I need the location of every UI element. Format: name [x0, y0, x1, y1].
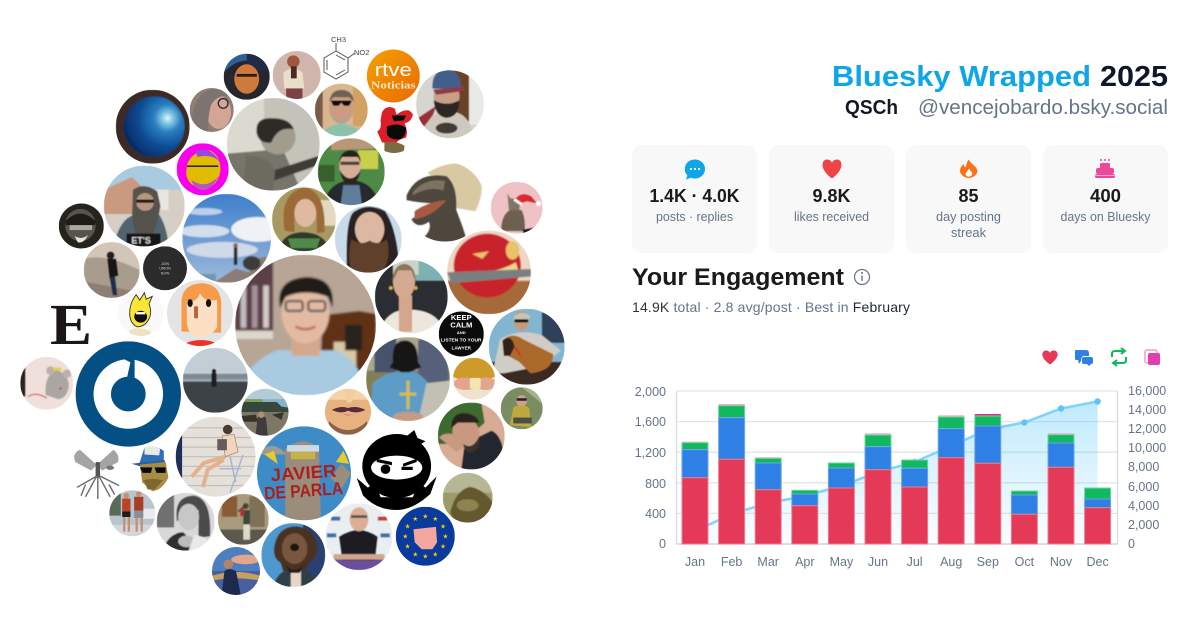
avatar: statue with cap and sunglasses [127, 445, 173, 491]
avatar: keep calm poster [439, 312, 484, 356]
avatar: chemical molecule: CH3 [331, 35, 346, 44]
icon: replies bubbles [1075, 350, 1093, 366]
avatar: man with dog [489, 309, 565, 385]
stat label: likes received [794, 209, 869, 224]
stat label: day posting [936, 209, 1001, 224]
avatar: El Español E logo: E [50, 292, 92, 357]
avatar: man with long wig [272, 187, 336, 251]
avatar: rat drawing [20, 357, 73, 410]
bar: Feb [719, 404, 745, 544]
avatar: blue eye [116, 90, 190, 164]
month labels: Dec [1086, 555, 1109, 569]
avatar: EU stars with fist: ★ [432, 551, 438, 558]
title: 2025 [1100, 61, 1168, 93]
cumulative area [695, 402, 1098, 544]
avatar: raptor with wool hat [407, 163, 482, 242]
month labels: Aug [940, 555, 962, 569]
avatar: man with sunglasses [315, 84, 368, 136]
avatar: sketch of person in chair [176, 417, 256, 497]
avatar: EU stars with fist: ★ [405, 544, 411, 551]
chart: monthly engagement [635, 384, 1166, 569]
avatar: dark text circle: NOW [161, 271, 170, 275]
panel: likes received [769, 145, 894, 253]
icon: chat bubble [685, 159, 705, 180]
avatar: EU stars with fist: ★ [432, 516, 438, 523]
avatar: keep calm poster: LISTEN TO YOUR [441, 338, 482, 343]
avatar: dark text circle: UNION [159, 267, 171, 271]
avatar: EU stars with fist: ★ [402, 534, 408, 541]
avatar: figure in street [218, 494, 269, 545]
avatar: blue target logo [76, 341, 181, 447]
avatar: toad [443, 473, 493, 523]
avatar: keep calm poster: LAWYER [452, 345, 472, 350]
avatar: keep calm poster: CALM [450, 321, 472, 330]
stat value: 400 [1090, 186, 1121, 206]
avatar: man in shop [318, 138, 385, 205]
right axis labels: 0 [1128, 537, 1135, 551]
display name: QSCh [845, 97, 898, 119]
month labels: Oct [1015, 555, 1035, 569]
right axis labels: 14,000 [1128, 403, 1166, 417]
avatar: homer cartoon [118, 290, 164, 336]
avatar: dark text circle [143, 246, 187, 290]
panel: posts and replies [632, 145, 757, 253]
avatar: rtve Noticias logo: rtve [375, 60, 412, 80]
month labels: Apr [795, 555, 815, 569]
avatar: Javier de Parla cartoon: JAVIER [270, 461, 337, 485]
avatar: long-bearded man [104, 166, 185, 246]
avatar: rtve Noticias logo [367, 50, 420, 102]
stat label: posts · replies [656, 209, 733, 224]
avatar: cup and hands [453, 358, 497, 400]
month labels [685, 555, 1109, 569]
handle: @vencejobardo.bsky.social [918, 97, 1168, 119]
avatar: EU stars with fist: ★ [412, 516, 418, 523]
avatar: helmet sketch [59, 204, 104, 248]
avatar: two men in red shirts [109, 490, 155, 536]
right axis labels: 10,000 [1128, 441, 1166, 455]
bar: Jun [865, 433, 891, 544]
avatar: black and white woman [157, 493, 215, 551]
avatar: man in blue hat [224, 54, 270, 100]
month labels: Jan [685, 555, 705, 569]
stat value: 1.4K · 4.0K [650, 186, 740, 206]
avatar: chemical molecule [324, 35, 369, 79]
avatar: EU stars with fist: ★ [440, 544, 446, 551]
avatar: Javier de Parla cartoon: DE PARLA [264, 478, 344, 504]
month labels: May [830, 555, 854, 569]
avatar: man in black shirt with logos [326, 503, 392, 570]
avatar: man over city view [212, 547, 260, 595]
stacked bars [682, 404, 1111, 544]
avatar: beach rocks and person [242, 389, 288, 436]
right axis labels: 6,000 [1128, 480, 1159, 494]
month labels: Mar [757, 555, 779, 569]
avatar: ninja logo [357, 430, 437, 510]
right axis labels: 4,000 [1128, 499, 1159, 513]
avatar: woman with glasses [190, 88, 234, 132]
bar: Aug [938, 415, 964, 544]
heading: your engagement: Your Engagement [632, 264, 844, 291]
left axis labels: 2,000 [635, 385, 666, 399]
stat value: 9.8K [812, 186, 850, 206]
panel: day posting streak [906, 145, 1031, 253]
avatar: EU stars with fist: ★ [412, 551, 418, 558]
right axis labels: 2,000 [1128, 518, 1159, 532]
icon: likes heart [1042, 350, 1058, 364]
avatar: keep calm poster: AND [457, 330, 466, 335]
bar: Mar [755, 457, 781, 544]
left axis labels: 1,600 [635, 415, 666, 429]
avatar: EU stars with fist: ★ [405, 524, 411, 531]
panel: days on Bluesky [1043, 145, 1168, 253]
avatar: keep calm poster: KEEP [451, 313, 472, 322]
icon: quotes squares [1145, 350, 1160, 365]
month labels: Jul [907, 555, 923, 569]
left axis labels: 800 [645, 477, 666, 491]
avatar: man leaning on arm [438, 402, 505, 470]
bar: Sep [975, 414, 1001, 544]
stat label second line: streak [951, 225, 986, 240]
month labels: Jun [868, 555, 888, 569]
avatar: Javier de Parla cartoon [257, 426, 351, 520]
bar: Oct [1011, 491, 1037, 544]
avatar: mustache close-up [325, 389, 371, 435]
avatar: woman in desert [84, 242, 140, 298]
avatar cluster [20, 35, 565, 595]
icon: heart [823, 160, 841, 178]
month labels: Feb [721, 555, 742, 569]
bar: May [828, 463, 854, 544]
right axis labels: 16,000 [1128, 384, 1166, 398]
avatar: child in old photo [273, 51, 321, 99]
bar: Jul [902, 460, 928, 544]
avatar: cat with santa hat [491, 182, 543, 234]
avatar: bearded man [335, 206, 402, 273]
avatar: EU stars with fist: ★ [422, 554, 428, 561]
icon: birthday cake [1095, 159, 1115, 178]
month labels: Nov [1050, 555, 1073, 569]
avatar: EU stars with fist: ★ [440, 524, 446, 531]
avatar: ink tree drawing [74, 450, 119, 499]
title: Bluesky Wrapped [832, 61, 1091, 93]
right axis labels: 12,000 [1128, 422, 1166, 436]
bar: Dec [1085, 488, 1111, 544]
avatar: dark text circle: JOIN [161, 262, 169, 266]
cumulative line [695, 398, 1101, 531]
avatar: man in cap [416, 69, 484, 138]
avatar: EU stars with fist: ★ [422, 514, 428, 521]
avatar: rtve Noticias logo: Noticias [371, 81, 416, 92]
left axis labels: 0 [659, 537, 666, 551]
avatar: chemical molecule: NO2 [354, 48, 369, 57]
chart legend [1042, 348, 1160, 366]
bar: Nov [1048, 433, 1074, 544]
engagement summary: 14.9K total · 2.8 avg/post · Best in February [632, 299, 910, 315]
bar: Apr [792, 490, 818, 544]
left axis labels: 1,200 [635, 446, 666, 460]
right axis labels [1128, 384, 1166, 551]
month labels: Sep [977, 555, 999, 569]
stat label: days on Bluesky [1060, 209, 1151, 224]
avatar: long-bearded man: ET'S [131, 235, 151, 245]
avatar: sky with climber [182, 194, 271, 283]
right axis labels: 8,000 [1128, 460, 1159, 474]
left axis labels [635, 385, 666, 551]
avatar: magenta cartoon face [177, 143, 229, 195]
avatar: darth vader with laptop [366, 337, 450, 422]
bar: Jan [682, 442, 708, 544]
avatar: apple cut by knife [447, 230, 531, 314]
icon: flame [960, 160, 978, 178]
avatar: EU stars with fist: ★ [442, 534, 448, 541]
avatar: woman in car [375, 260, 448, 333]
avatar: dog-headed figure [261, 523, 325, 587]
avatar: large selfie [235, 254, 376, 396]
avatar: orange-haired cartoon [167, 280, 233, 346]
stat value: 85 [958, 186, 978, 206]
left axis labels: 400 [645, 507, 666, 521]
avatar: woman with guitar [227, 98, 320, 191]
avatar: EU stars with fist [396, 507, 455, 566]
icon: reposts arrows [1112, 348, 1126, 366]
avatar: hellboy [377, 107, 413, 153]
avatar: man in yellow jacket [501, 387, 543, 429]
avatar: silhouette on beach [183, 348, 248, 413]
icon: info [854, 270, 870, 284]
